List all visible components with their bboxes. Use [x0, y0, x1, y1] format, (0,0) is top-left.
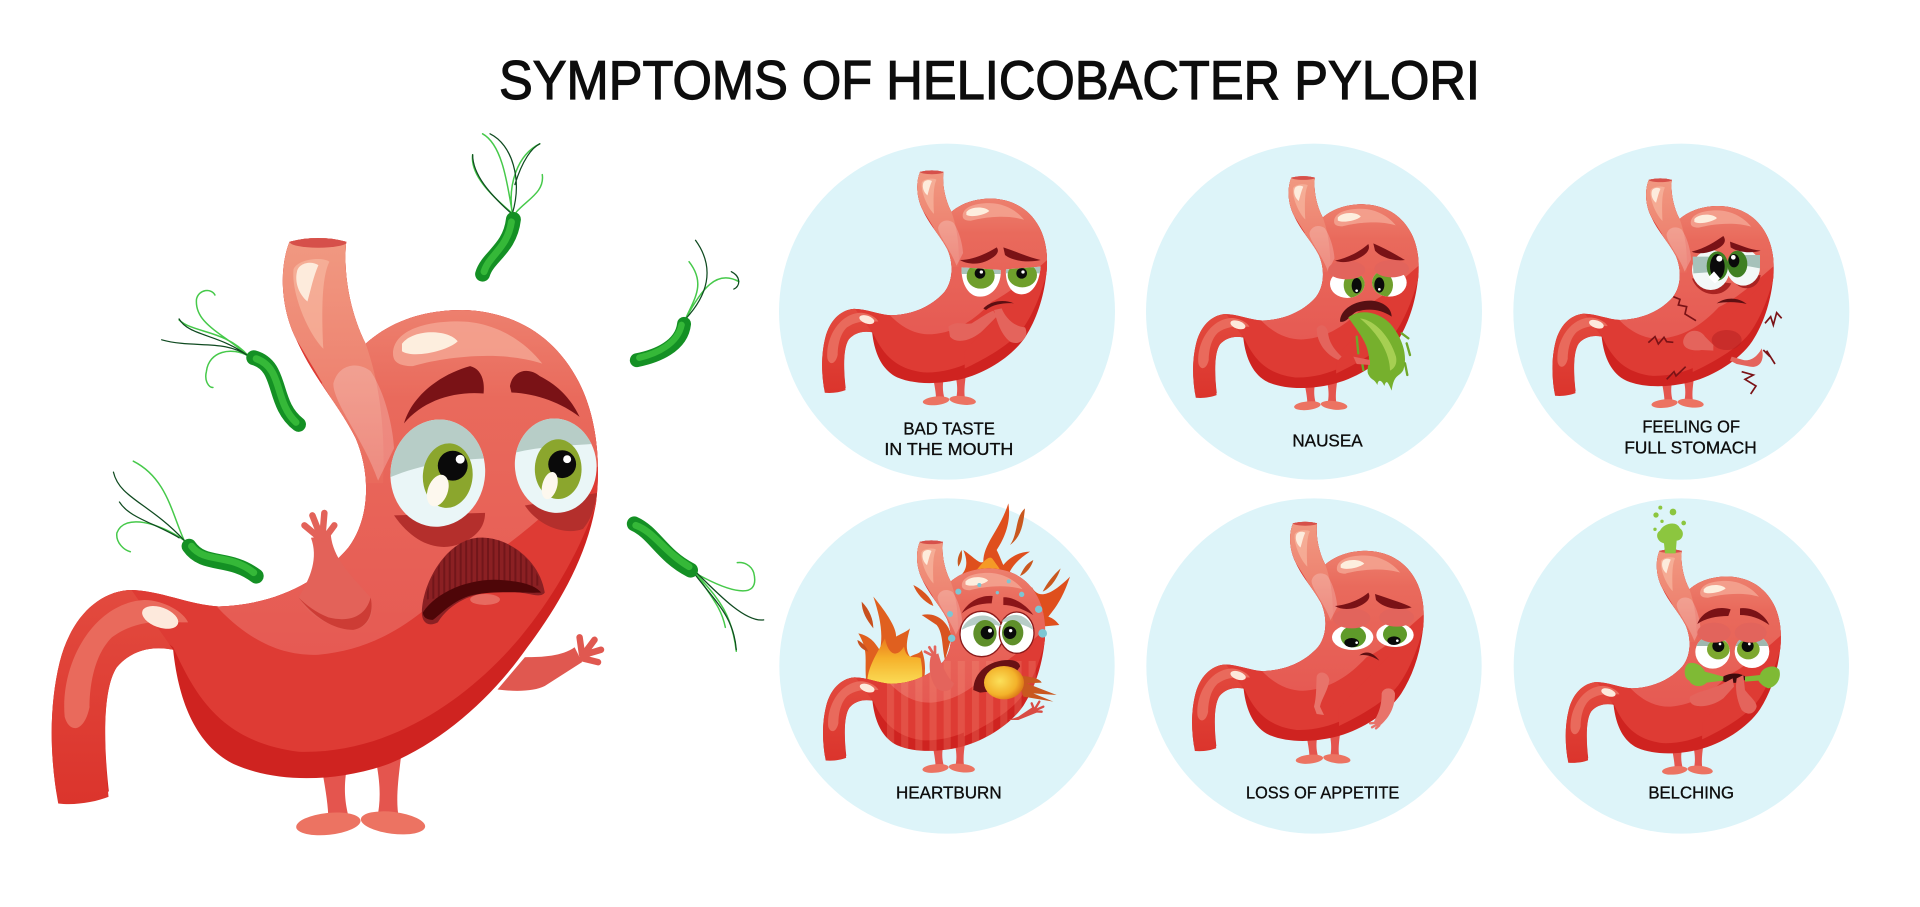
- title: SYMPTOMS OF HELICOBACTER PYLORI: [499, 49, 1480, 111]
- sore spot: [1712, 330, 1742, 350]
- panel: belching: [1514, 498, 1849, 834]
- label: BAD TASTE: [903, 418, 995, 438]
- flame: top: [953, 503, 1061, 592]
- mouth: [422, 538, 545, 624]
- mouth: [973, 660, 1020, 693]
- eyebrows: [960, 247, 1041, 264]
- bacterium: lower left: [113, 461, 256, 576]
- stomach body: [1563, 535, 1784, 776]
- stomach body: [45, 200, 607, 838]
- panel: bad taste in the mouth: [779, 144, 1115, 480]
- main stomach character with bacteria: [45, 134, 764, 838]
- mouth: [1717, 299, 1747, 304]
- panel: heartburn: [779, 498, 1115, 834]
- panel: loss of appetite: [1146, 498, 1482, 834]
- arms: [1690, 675, 1757, 714]
- eyelids: [1333, 608, 1414, 628]
- flame: right: [1032, 577, 1070, 627]
- label: HEARTBURN: [896, 782, 1002, 802]
- eyelids: [1697, 623, 1767, 643]
- label line 2: IN THE MOUTH: [884, 439, 1013, 459]
- eye bags: [1692, 275, 1761, 294]
- circle background: [779, 144, 1115, 480]
- label line 2: FULL STOMACH: [1624, 437, 1757, 457]
- right arm: [498, 637, 601, 691]
- eye bags: [394, 493, 597, 547]
- eyebrows: [1692, 236, 1761, 253]
- bacterium: upper left: [162, 291, 298, 424]
- left arm: [298, 513, 372, 630]
- stripes overlay: [887, 661, 1036, 751]
- right eye: [514, 418, 597, 513]
- circle background: [1146, 498, 1482, 834]
- eyes: [960, 611, 1034, 657]
- gas puffs from mouth: [1685, 663, 1780, 688]
- mouth: [983, 301, 1014, 310]
- left eye: [390, 420, 486, 527]
- arm: [1317, 325, 1342, 360]
- stomach body: [1189, 506, 1428, 765]
- mouth: [1359, 653, 1379, 661]
- sweat drops: [947, 579, 1047, 642]
- fireball: [984, 666, 1057, 702]
- right arm: [1008, 702, 1043, 720]
- panel: nausea: [1146, 144, 1482, 480]
- circle background: [779, 498, 1115, 834]
- flame: behind left: [857, 597, 925, 687]
- eyebrows: [962, 596, 1033, 615]
- left arm: [925, 647, 954, 691]
- vomit: [1348, 312, 1410, 391]
- circle background: [1513, 144, 1849, 480]
- eyes: [1695, 638, 1770, 669]
- stomach body: [819, 155, 1051, 406]
- flame: behind esophagus: [913, 585, 952, 660]
- stomach body: [1190, 161, 1422, 411]
- right arm: [1370, 688, 1395, 728]
- eyebrows: [404, 366, 580, 423]
- label: NAUSEA: [1292, 431, 1363, 451]
- left arm: [1314, 673, 1329, 715]
- bacterium: lower right: [634, 524, 764, 651]
- eyelids: [1328, 260, 1409, 279]
- eyes: [1332, 623, 1414, 650]
- bacterium: upper right: [637, 240, 739, 360]
- label: FEELING OF: [1642, 417, 1740, 437]
- bacterium: top: [472, 134, 543, 274]
- eyes: [962, 266, 1041, 297]
- stomach body: [820, 525, 1049, 774]
- mouth: [1340, 301, 1392, 322]
- eyes: [1692, 249, 1760, 290]
- eyes: [1330, 273, 1407, 298]
- arms: [948, 308, 1026, 343]
- mouth: [1720, 673, 1747, 683]
- gas puff from esophagus: [1653, 506, 1686, 553]
- circle background: [1514, 498, 1849, 834]
- eyebrows: [1335, 243, 1405, 262]
- eyebrows: [1335, 593, 1412, 609]
- eyebrows: [1697, 608, 1769, 625]
- pain marks: [1648, 297, 1782, 394]
- hand: [1353, 357, 1370, 365]
- circle background: [1146, 144, 1482, 480]
- stomach body: [1550, 164, 1777, 409]
- arms: [1683, 331, 1763, 367]
- label: BELCHING: [1648, 782, 1734, 802]
- panel: feeling of full stomach: [1513, 144, 1849, 480]
- label: LOSS OF APPETITE: [1246, 782, 1399, 802]
